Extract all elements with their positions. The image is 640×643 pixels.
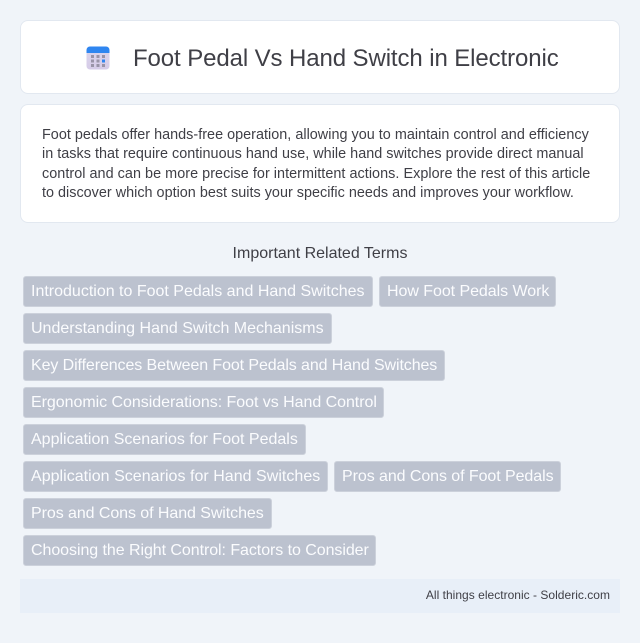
tag: Choosing the Right Control: Factors to Consider <box>31 542 369 559</box>
intro paragraph: control and can be more precise for intermittent actions. Explore the rest of this article <box>42 166 590 182</box>
tag: Understanding Hand Switch Mechanisms <box>31 320 324 337</box>
tag list <box>23 276 561 566</box>
tag <box>23 387 384 418</box>
panel: header <box>20 20 620 94</box>
tag: How Foot Pedals Work <box>387 283 549 300</box>
tag <box>23 498 272 529</box>
tag <box>23 535 376 566</box>
tag <box>23 313 332 344</box>
tag: Key Differences Between Foot Pedals and Hand Switches <box>31 357 437 374</box>
panel: intro text <box>20 104 620 223</box>
title: Foot Pedal Vs Hand Switch in Electronic <box>133 45 559 72</box>
footer: All things electronic - Solderic.com <box>426 588 610 602</box>
tag: Application Scenarios for Foot Pedals <box>31 431 298 448</box>
tag <box>379 276 556 307</box>
tag <box>23 461 328 492</box>
tag <box>334 461 561 492</box>
tag: Pros and Cons of Hand Switches <box>31 505 264 522</box>
intro paragraph: to discover which option best suits your specific needs and improves your workflow. <box>42 185 574 201</box>
tag <box>23 276 373 307</box>
tag: Application Scenarios for Hand Switches <box>31 468 320 485</box>
tag: Ergonomic Considerations: Foot vs Hand Control <box>31 394 377 411</box>
icon: calendar <box>86 46 110 70</box>
intro paragraph: in tasks that require continuous hand use, while hand switches provide direct manual <box>42 146 584 162</box>
tag <box>23 424 306 455</box>
tag: Introduction to Foot Pedals and Hand Switches <box>31 283 365 300</box>
tag: Pros and Cons of Foot Pedals <box>342 468 554 485</box>
heading: related terms: Important Related Terms <box>233 245 407 262</box>
footer <box>20 579 620 613</box>
tag <box>23 350 445 381</box>
intro paragraph: Foot pedals offer hands-free operation, allowing you to maintain control and efficiency <box>42 127 589 143</box>
intro paragraph <box>42 127 590 201</box>
